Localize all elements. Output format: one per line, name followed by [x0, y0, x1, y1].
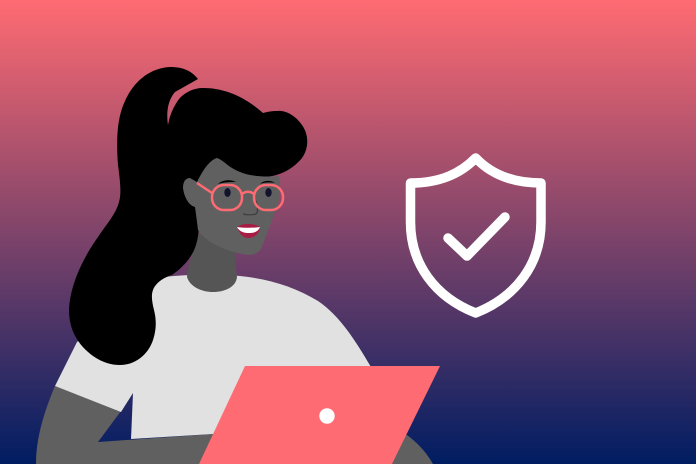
check mark: [448, 217, 505, 256]
arms: [36, 386, 433, 464]
neck: [187, 233, 237, 292]
nose: [243, 201, 258, 215]
shield outline: [410, 158, 541, 313]
glasses: [197, 183, 283, 210]
eyes: [224, 188, 272, 197]
mouth: [237, 224, 260, 238]
laptop logo dot: [319, 408, 335, 424]
eyebrows: [218, 180, 275, 184]
laptop lid: [199, 366, 440, 464]
icon: security shield with check mark: [410, 158, 541, 313]
shirt: [55, 275, 371, 439]
laptop: [199, 366, 440, 464]
face: [183, 158, 280, 255]
hair: [69, 67, 307, 365]
woman figure: [36, 67, 433, 464]
